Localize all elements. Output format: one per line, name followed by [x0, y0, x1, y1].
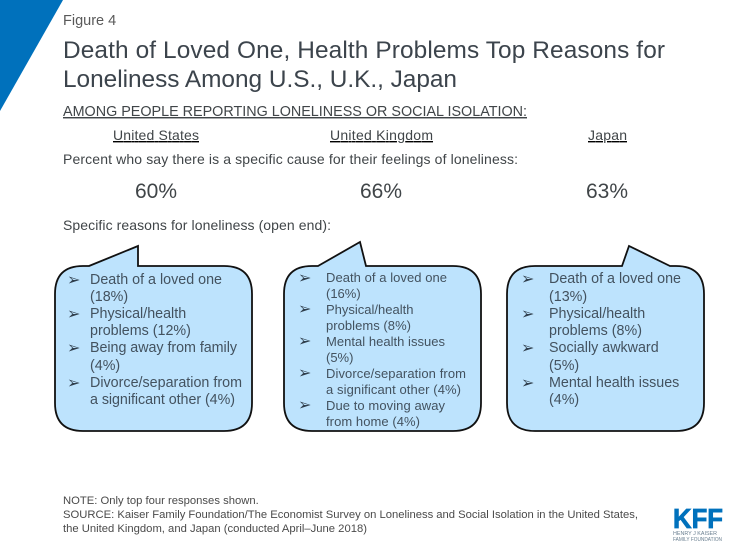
country headers: United States	[113, 127, 199, 143]
list: United Kingdom reasons: a significant other (4%)	[326, 382, 461, 397]
list: United Kingdom reasons: (16%)	[326, 286, 361, 301]
list: Japan reasons: Physical/health	[549, 306, 645, 322]
list: United Kingdom reasons: ➢	[298, 365, 311, 382]
list: United Kingdom reasons: ➢	[298, 333, 311, 350]
KFF logo: FAMILY FOUNDATION	[673, 537, 722, 543]
list: Japan reasons: problems (8%)	[549, 323, 642, 339]
list: Japan reasons: Mental health issues	[549, 375, 679, 391]
list: Japan reasons: ➢	[521, 306, 534, 323]
list: United Kingdom reasons: (5%)	[326, 350, 353, 365]
list: United Kingdom reasons: ➢	[298, 270, 311, 287]
list: United Kingdom reasons: Physical/health	[326, 302, 413, 317]
bubble: Japan	[507, 246, 704, 431]
list: Japan reasons: (4%)	[549, 392, 579, 408]
list: United States reasons	[67, 272, 242, 408]
percentages	[135, 180, 628, 203]
source notes: NOTE: Only top four responses shown.	[63, 495, 259, 507]
KFF logo: HENRY J KAISER	[673, 531, 717, 537]
list: United Kingdom reasons: ➢	[298, 301, 311, 318]
country headers: United Kingdom	[330, 127, 433, 143]
country headers	[113, 127, 627, 143]
percentages: 63%	[586, 180, 628, 203]
list: Japan reasons: ➢	[521, 340, 534, 357]
list: United States reasons: (18%)	[90, 289, 128, 305]
percentages: 66%	[360, 180, 402, 203]
list: Japan reasons: ➢	[521, 271, 534, 288]
bubble: United States	[55, 246, 252, 431]
country headers: Japan	[588, 127, 627, 143]
list: United Kingdom reasons: Divorce/separation from	[326, 366, 466, 381]
title	[63, 37, 665, 93]
list: United States reasons: ➢	[67, 272, 80, 289]
list: Japan reasons: Socially awkward	[549, 340, 659, 356]
figure label: Figure 4	[63, 13, 116, 29]
list: United States reasons: ➢	[67, 375, 80, 392]
list: United Kingdom reasons: problems (8%)	[326, 318, 411, 333]
list: United States reasons: Being away from family	[90, 340, 238, 356]
list: United States reasons: (4%)	[90, 358, 120, 374]
list: Japan reasons: ➢	[521, 375, 534, 392]
specific reasons heading: Specific reasons for loneliness (open end):	[63, 217, 331, 233]
list: Japan reasons	[521, 271, 681, 408]
list: United Kingdom reasons: ➢	[298, 397, 311, 414]
list: United States reasons: a significant other (4%)	[90, 392, 235, 408]
list: United States reasons: ➢	[67, 306, 80, 323]
corner accent	[0, 0, 63, 111]
list: United States reasons: Death of a loved one	[90, 272, 222, 288]
percentages: 60%	[135, 180, 177, 203]
specific cause question: Percent who say there is a specific cause for their feelings of loneliness:	[63, 151, 518, 167]
list: United Kingdom reasons: from home (4%)	[326, 414, 420, 429]
list: United Kingdom reasons: Death of a loved one	[326, 270, 447, 285]
list: United States reasons: problems (12%)	[90, 323, 191, 339]
list: United Kingdom reasons: Due to moving away	[326, 398, 446, 413]
list: United Kingdom reasons	[298, 270, 466, 429]
list: Japan reasons: (13%)	[549, 289, 587, 305]
subheading: AMONG PEOPLE REPORTING LONELINESS OR SOCIAL ISOLATION:	[63, 104, 527, 120]
title: Loneliness Among U.S., U.K., Japan	[63, 66, 457, 93]
list: United States reasons: ➢	[67, 340, 80, 357]
title: Death of Loved One, Health Problems Top Reasons for	[63, 37, 665, 64]
source notes: SOURCE: Kaiser Family Foundation/The Economist Survey on Loneliness and Social Isolation in the United States,	[63, 509, 638, 521]
list: Japan reasons: Death of a loved one	[549, 271, 681, 287]
KFF logo: KFF	[673, 503, 723, 534]
source notes: the United Kingdom, and Japan (conducted April–June 2018)	[63, 523, 367, 535]
source notes	[63, 495, 638, 535]
list: United Kingdom reasons: Mental health issues	[326, 334, 446, 349]
list: Japan reasons: (5%)	[549, 358, 579, 374]
list: United States reasons: Divorce/separation from	[90, 375, 242, 391]
list: United States reasons: Physical/health	[90, 306, 186, 322]
bubble: United Kingdom	[284, 242, 481, 431]
